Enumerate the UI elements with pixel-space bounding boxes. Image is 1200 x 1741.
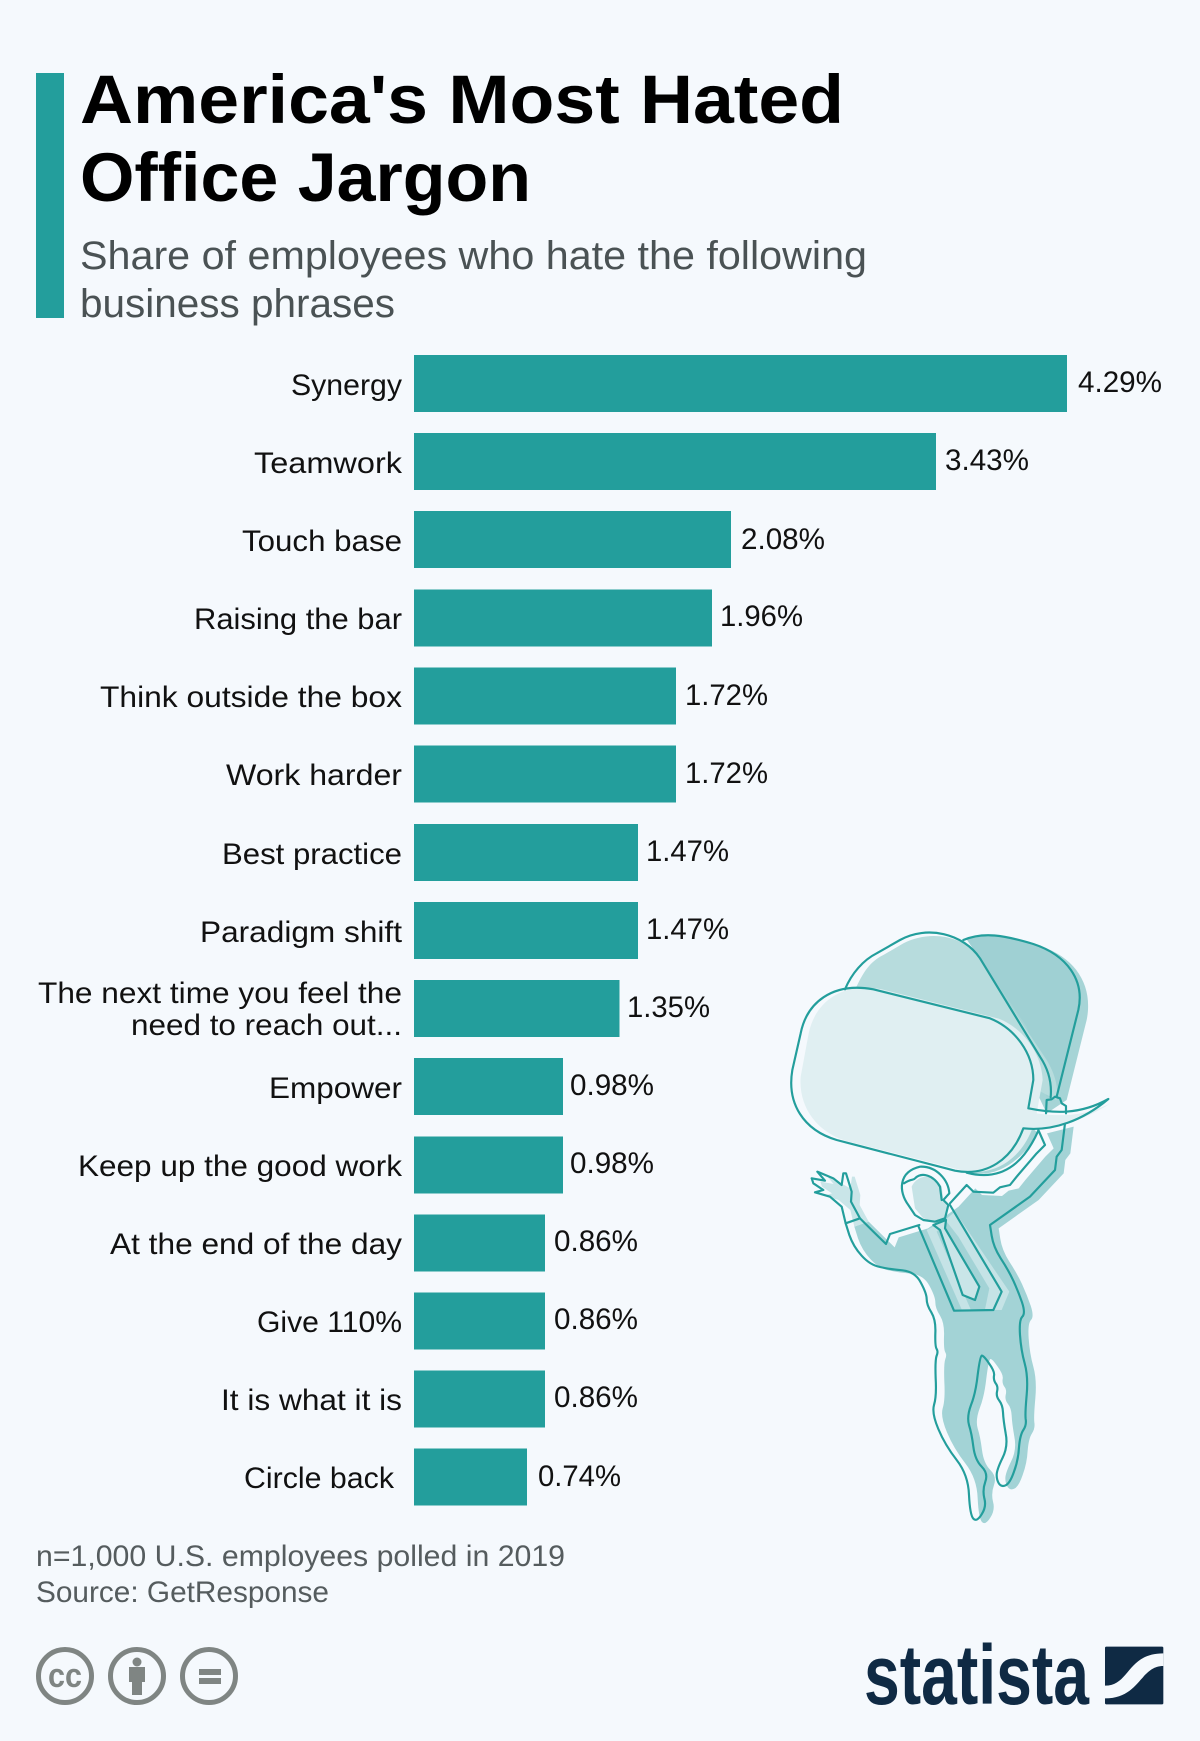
row: The next time you feel the need to reach out: need to reach out... xyxy=(131,1009,402,1042)
icon: no derivatives xyxy=(182,1650,236,1702)
row: The next time you feel the need to reach out xyxy=(38,977,710,1042)
title: America's Most Hated xyxy=(80,61,844,138)
row: Think outside the box: Think outside the box xyxy=(100,681,402,714)
row: Paradigm shift: 1.47% xyxy=(646,913,729,946)
row: Raising the bar xyxy=(194,590,803,646)
back bubble fill xyxy=(973,936,1088,1113)
row: Teamwork: 3.43% xyxy=(945,444,1029,477)
row: Synergy: Synergy xyxy=(291,369,402,402)
row: Best practice: Best practice xyxy=(222,838,402,871)
row: The next time you feel the need to reach out: 1.35% xyxy=(627,991,710,1024)
row: Teamwork xyxy=(254,433,1029,490)
row: Empower: 0.98% xyxy=(570,1069,654,1102)
subtitle: Share of employees who hate the following xyxy=(80,234,867,278)
tie outline xyxy=(933,1220,979,1300)
statista mark xyxy=(1105,1647,1163,1704)
row: It is what it is xyxy=(221,1370,638,1428)
tie fill xyxy=(934,1220,979,1300)
row: The next time you feel the need to reach out: The next time you feel the xyxy=(38,977,402,1010)
row: Touch base: Touch base xyxy=(242,525,402,558)
row: Keep up the good work xyxy=(78,1136,654,1194)
row: Touch base: 2.08% xyxy=(741,523,825,556)
row: Empower: Empower xyxy=(269,1072,402,1105)
row: Synergy xyxy=(291,355,1162,412)
row: Give 110%: 0.86% xyxy=(554,1303,638,1336)
row: Give 110%: Give 110% xyxy=(257,1306,402,1339)
source note xyxy=(36,1540,565,1609)
middle bubble fill xyxy=(855,936,1057,1100)
source note: Source: GetResponse xyxy=(36,1576,329,1609)
jacket stripe between shirt and tie xyxy=(937,1222,989,1309)
row: Touch base xyxy=(242,511,825,568)
lower part of middle bubble xyxy=(967,1120,1038,1174)
row: Best practice: 1.47% xyxy=(646,835,729,868)
row: Circle back: 0.74% xyxy=(538,1460,621,1493)
icon: attribution xyxy=(110,1650,164,1702)
title accent bar xyxy=(36,73,64,318)
row: Synergy: 4.29% xyxy=(1078,366,1162,399)
row: Raising the bar: Raising the bar xyxy=(194,603,402,636)
row: Work harder xyxy=(226,746,768,802)
subtitle: business phrases xyxy=(80,282,395,326)
row: Raising the bar: 1.96% xyxy=(720,600,803,633)
back bubble outline xyxy=(963,935,1080,1097)
row: Empower xyxy=(269,1058,654,1115)
subtitle xyxy=(80,234,867,326)
back bubble inner fill xyxy=(967,936,1080,1097)
figure: businessman xyxy=(812,1123,1074,1523)
middle bubble outline xyxy=(845,933,1051,1175)
body outline xyxy=(812,1123,1065,1520)
statista logo: statista xyxy=(864,1628,1090,1722)
row: Paradigm shift: Paradigm shift xyxy=(200,916,403,949)
front bubble fill xyxy=(800,988,1111,1172)
icon: creative commons xyxy=(38,1650,92,1702)
speech bubbles xyxy=(791,933,1111,1175)
row: Paradigm shift xyxy=(200,902,729,959)
illustration: businessman holding speech bubbles xyxy=(791,933,1111,1523)
raised hand fill xyxy=(820,1175,869,1227)
row: Circle back xyxy=(244,1448,621,1506)
row: Best practice xyxy=(222,824,729,881)
row: Give 110% xyxy=(257,1292,638,1350)
title xyxy=(80,61,844,216)
title: Office Jargon xyxy=(80,139,531,216)
row: Keep up the good work: 0.98% xyxy=(570,1147,654,1180)
bar chart xyxy=(38,355,1162,1506)
row: At the end of the day xyxy=(110,1214,638,1272)
row: Work harder: Work harder xyxy=(226,759,402,792)
row: Circle back: Circle back xyxy=(244,1462,395,1495)
row: Teamwork: Teamwork xyxy=(254,447,403,480)
cuff xyxy=(846,1218,860,1223)
row: Think outside the box: 1.72% xyxy=(685,679,768,712)
head fill xyxy=(912,1177,948,1222)
head outline xyxy=(902,1167,949,1222)
figure colour fill xyxy=(854,1127,1074,1523)
row: It is what it is: It is what it is xyxy=(221,1384,402,1417)
row: Keep up the good work: Keep up the good work xyxy=(78,1150,403,1183)
source note: n=1,000 U.S. employees polled in 2019 xyxy=(36,1540,565,1573)
row: Work harder: 1.72% xyxy=(685,757,768,790)
shirt outline xyxy=(918,1205,1002,1311)
raised hand xyxy=(1046,1097,1066,1113)
row: At the end of the day: At the end of the day xyxy=(110,1228,402,1261)
row: At the end of the day: 0.86% xyxy=(554,1225,638,1258)
front bubble outline xyxy=(791,988,1108,1172)
shirt fill xyxy=(927,1212,1009,1310)
row: It is what it is: 0.86% xyxy=(554,1381,638,1414)
icon: creative commons: cc xyxy=(48,1657,82,1695)
row: Think outside the box xyxy=(100,668,768,724)
